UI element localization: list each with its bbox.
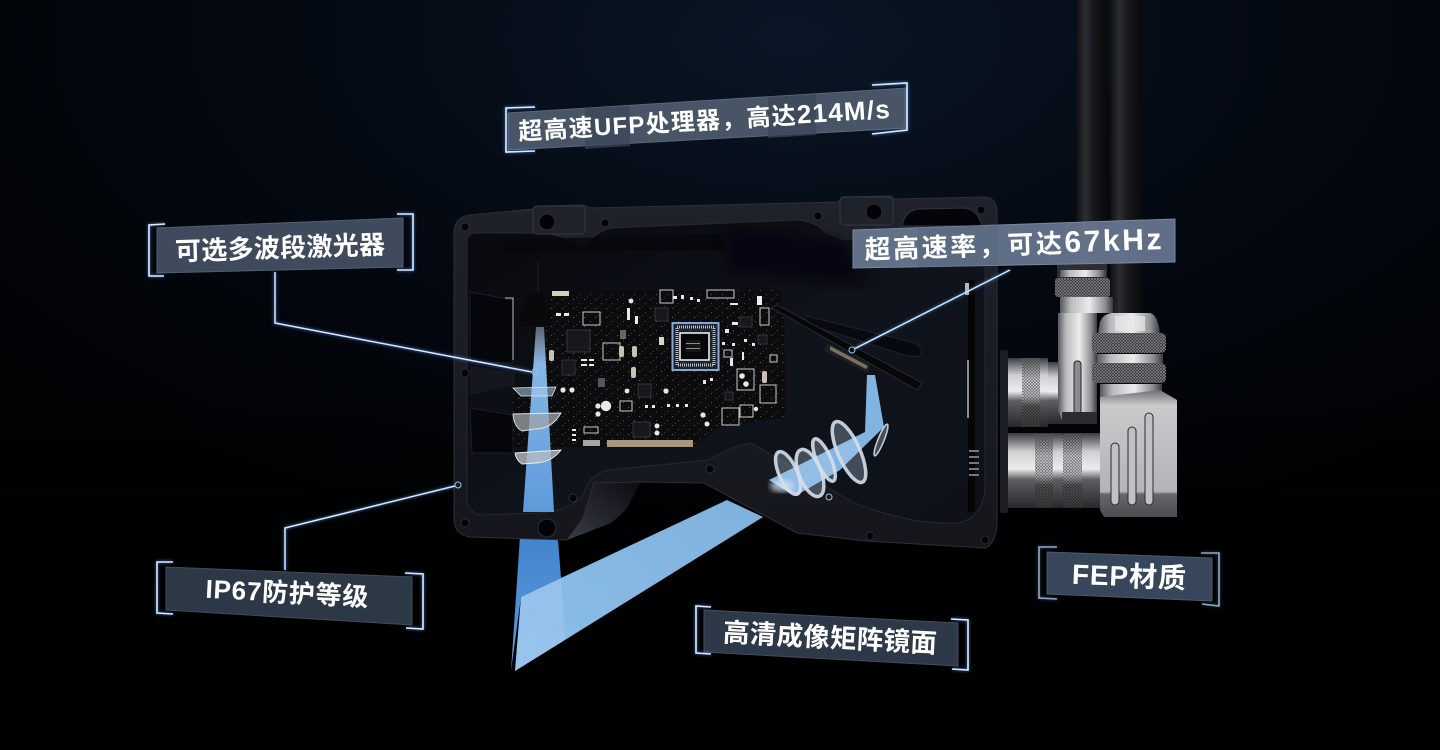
top shadow channel <box>500 234 726 253</box>
left bracket line <box>505 298 513 360</box>
beam bright spot <box>770 480 794 492</box>
right strip board <box>968 280 975 512</box>
cables <box>1076 0 1142 320</box>
left ribs <box>470 366 515 395</box>
raised slot on right <box>805 316 922 356</box>
label: IP67: IP67防护等级 <box>205 574 369 612</box>
white parts <box>549 291 767 441</box>
leader line: FEP <box>1127 368 1129 555</box>
blue beam right <box>769 375 884 495</box>
lens group left <box>513 387 561 464</box>
label: lens matrix <box>696 606 968 670</box>
circuit board <box>513 262 786 447</box>
housing cavity <box>467 220 985 523</box>
label: FEP <box>1039 547 1219 606</box>
left cavity pockets <box>470 292 513 453</box>
label: rate: 超高速率，可达67kHz <box>864 223 1162 266</box>
components outlined <box>583 290 777 433</box>
label: UFP processor: 超高速UFP处理器，高达214M/s <box>517 94 891 146</box>
lower horizontal connector <box>1008 433 1100 508</box>
front elbow connector <box>1092 313 1177 517</box>
mirror arm <box>772 305 922 390</box>
leader line: laser <box>275 272 538 375</box>
label: lens matrix: 高清成像矩阵镜面 <box>722 617 938 659</box>
leader line: rate <box>849 270 1010 353</box>
mounting plate <box>1000 350 1008 513</box>
processor chip <box>672 323 718 370</box>
label: laser <box>149 214 413 276</box>
cavity dark top right <box>725 228 868 285</box>
label: laser: 可选多波段激光器 <box>175 230 385 266</box>
screw holes <box>461 197 989 544</box>
leader line: lens <box>826 494 832 618</box>
label: FEP: FEP材质 <box>1071 559 1187 594</box>
blue beam left <box>523 327 554 512</box>
bump slot top right <box>902 208 982 226</box>
gold edge connector <box>583 440 693 447</box>
connector assembly <box>1000 264 1177 517</box>
upper horizontal connector <box>1008 358 1062 427</box>
leader line: IP67 <box>285 482 461 570</box>
label: IP67 <box>157 562 423 629</box>
housing <box>454 196 997 548</box>
beam below housing <box>511 500 763 671</box>
leader line: processor <box>695 143 697 345</box>
lens matrix right <box>770 417 890 500</box>
dark chips <box>562 308 767 437</box>
housing rim <box>454 196 997 548</box>
rear elbow connector <box>1055 264 1113 424</box>
housing side face <box>567 483 640 540</box>
dark connector block <box>519 262 552 326</box>
